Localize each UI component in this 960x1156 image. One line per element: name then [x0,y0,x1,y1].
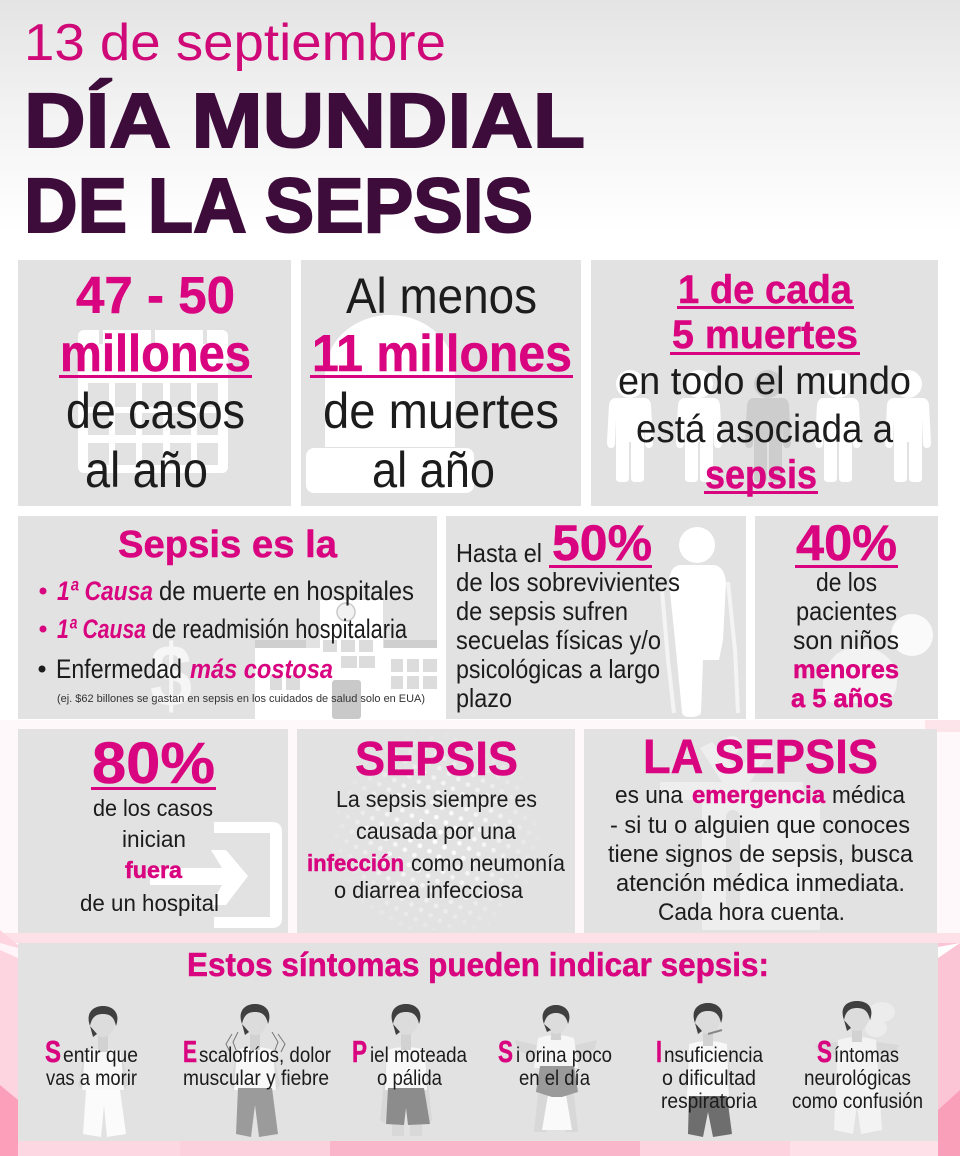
paragraph: survivors: plazo [456,683,512,713]
figure 5 muertes: 5 muertes [672,313,858,357]
figure millones: millones [60,325,251,383]
icon: hospital and dollar sign: $ [150,626,192,725]
paragraph: survivors: de sepsis sufren [456,596,628,626]
figure: woman 5 [683,1003,733,1137]
bullet: 1a causa de muerte: de muerte en hospitales [159,576,414,606]
text de muertes: de muertes [323,383,559,439]
panel: 40% ninos [755,515,938,719]
paragraph: survivors: secuelas físicas y/o [456,625,661,655]
symptom: escalofrios: scalofríos, dolor [199,1044,331,1067]
figure 11 millones: 11 millones [312,325,572,383]
panel: 1 de cada 5 muertes [591,260,938,506]
figure: woman 6 in coat [815,1001,899,1134]
text menores a 5 anos: menores [793,654,899,684]
text en todo el mundo: en todo el mundo [618,360,911,403]
symptom: escalofrios: E [183,1034,197,1069]
main title line 1: DÍA MUNDIAL [24,78,585,164]
text children: son niños [793,625,899,655]
figure: woman 1 [78,1006,128,1137]
symptom: piel moteada: iel moteada [370,1044,467,1067]
symptom: sintomas neurologicos: como confusión [792,1090,923,1113]
bullet: 1a causa de muerte [40,576,414,606]
icon: calendar [78,322,228,473]
symptom: sintomas neurologicos: neurológicas [804,1067,911,1090]
paragraph: cause: o diarrea infecciosa [334,877,523,903]
icon: crawling child [823,614,933,703]
symptom: si orina poco [498,1034,612,1090]
date heading: 13 de septiembre [24,14,446,72]
figure: woman 3 [380,1004,432,1136]
paragraph: emergency: tiene signos de sepsis, busca [608,841,914,868]
paragraph: emergency: médica [832,782,906,809]
text children [793,567,899,655]
heading la sepsis: LA SEPSIS [643,731,878,784]
bullet: 1a causa de readmision [40,614,408,644]
main title line 2: DE LA SEPSIS [24,163,533,249]
paragraph: emergency: emergencia [692,782,826,809]
heading sepsis: SEPSIS [355,733,518,786]
word fuera: fuera [125,857,182,883]
symptom: insuficiencia respiratoria: respiratoria [661,1090,757,1113]
icon: person with raised arms [660,736,820,930]
cost footnote: (ej. $62 billones se gastan en sepsis en los cuidados de salud solo en EUA) [57,693,425,705]
symptom: si orina poco: S [498,1034,513,1069]
icon: tombstone [306,315,474,493]
text al año: al año [372,442,495,498]
bullet: 1a causa de readmision: 1ª Causa [57,614,146,644]
bullet: enfermedad mas costosa: Enfermedad [56,654,182,684]
figure 40%: 40% [796,515,897,571]
panel: sepsis es la [18,516,437,725]
heading sepsis es la: Sepsis es la [118,524,338,566]
paragraph: survivors [456,567,680,713]
symptom: escalofrios [183,1034,331,1090]
symptom: sentir que vas a morir: vas a morir [46,1067,137,1090]
paragraph: emergency [608,782,914,926]
text de los casos: de los casos [93,795,213,821]
figure 50%: 50% [552,515,652,571]
text children: pacientes [796,596,897,626]
icon: hospital and dollar sign [150,600,437,725]
bullet: enfermedad mas costosa: más costosa [190,654,333,684]
panel: 50% sobrevivientes [446,515,746,719]
text inician: inician [122,826,186,852]
symptom: insuficiencia respiratoria: o dificultad [662,1067,756,1090]
icon: exit arrow [150,822,282,928]
text menores a 5 anos: a 5 años [791,683,893,713]
text de un hospital: de un hospital [80,890,219,916]
title block [24,14,585,249]
paragraph: cause: La sepsis siempre es [336,786,537,812]
figure: woman 2 [226,1004,285,1137]
panel: symptoms [18,943,938,1141]
paragraph: survivors: psicológicas a largo [456,654,660,684]
symptom: si orina poco: i orina poco [516,1044,612,1067]
symptom: escalofrios: muscular y fiebre [183,1067,329,1090]
figure 47-50: 47 - 50 [76,267,235,325]
symptom: insuficiencia respiratoria: I [656,1034,662,1069]
paragraph: cause: causada por una [356,818,516,844]
symptom: piel moteada: o pálida [377,1067,442,1090]
symptom: sintomas neurologicos: íntomas [834,1044,899,1067]
text esta asociada a: está asociada a [636,408,893,451]
paragraph: emergency: es una [615,782,684,809]
symptom: insuficiencia respiratoria [656,1034,763,1113]
text children: de los [816,567,877,597]
panel: sepsis definition [297,729,575,933]
symptom: sintomas neurologicos: S [817,1034,832,1069]
symptom: sintomas neurologicos [792,1034,923,1113]
text hasta el: Hasta el [456,538,542,568]
icon: dotted germ [354,752,518,918]
paragraph: emergency: Cada hora cuenta. [658,899,845,926]
panel: 11 millones de muertes [301,260,581,506]
symptom: sentir que vas a morir [45,1034,138,1090]
heading symptoms: Estos síntomas pueden indicar sepsis: [187,946,769,983]
symptom: piel moteada [352,1034,467,1090]
text menores a 5 anos [791,654,899,713]
word sepsis: sepsis [705,453,817,497]
symptom: sentir que vas a morir: S [45,1034,61,1069]
paragraph: cause: como neumonía [411,850,565,876]
paragraph: survivors: de los sobrevivientes [456,567,680,597]
figure 1 de cada: 1 de cada [678,268,853,312]
panel: 47-50 millones de casos [18,260,291,506]
icon: person on crutches [662,527,738,717]
bullet: 1a causa de muerte: 1ª Causa [57,576,153,606]
icon: row of people [607,370,931,482]
figure 80%: 80% [92,731,215,796]
symptom: insuficiencia respiratoria: nsuficiencia [664,1044,763,1067]
paragraph: cause [307,786,565,903]
symptom: piel moteada: P [352,1034,367,1069]
paragraph: emergency: atención médica inmediata. [616,870,905,897]
panel: la sepsis emergency [584,729,937,933]
paragraph: emergency: - si tu o alguien que conoces [610,812,910,839]
bullet: 1a causa de readmision: de readmisión hospitalaria [152,614,408,644]
text de casos: de casos [66,383,245,439]
bullet: enfermedad mas costosa [38,654,333,684]
symptom: sentir que vas a morir: entir que [63,1044,138,1067]
panel: 80% fuera de un hospital [18,729,288,933]
text al año: al año [85,442,208,498]
paragraph: cause: infección [307,850,404,876]
figure: woman 4 seated [515,1005,597,1132]
text al menos: Al menos [346,268,537,324]
symptom: si orina poco: en el día [519,1067,590,1090]
